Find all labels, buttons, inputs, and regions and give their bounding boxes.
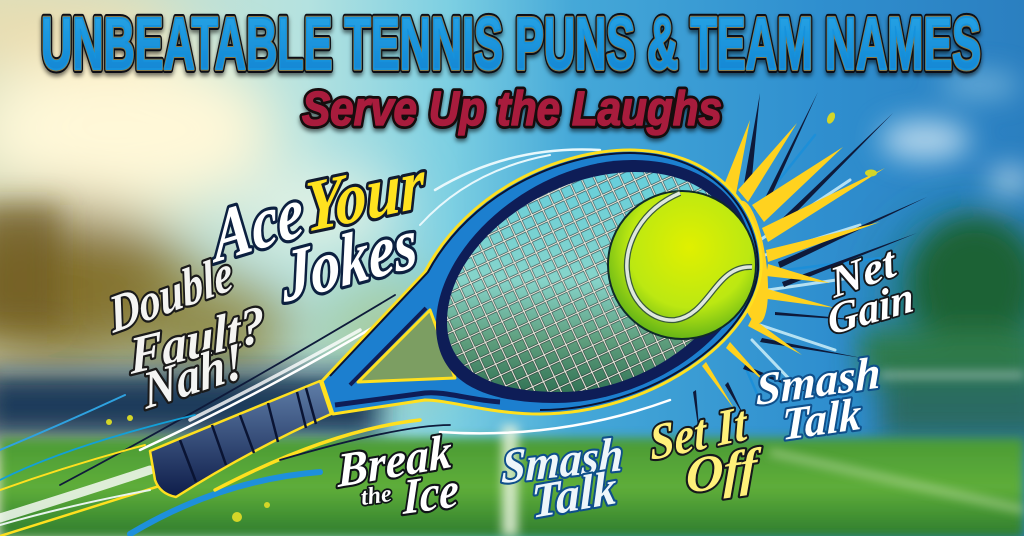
pun: Set It Off: Off (686, 438, 762, 505)
pun: Break the Ice: Break (336, 425, 453, 498)
paint flecks (106, 111, 877, 522)
pun: Smash Talk (bottom): Smash (501, 428, 624, 495)
pun: Smash Talk (right) (756, 346, 880, 450)
pun: Ace Your Jokes: Jokes (277, 201, 420, 319)
pun: Set It Off: Set It (648, 395, 750, 472)
pun: Smash Talk (right): Smash (756, 346, 880, 415)
racket frame silhouette (322, 150, 761, 414)
pun: Ace Your Jokes: Your (304, 141, 427, 248)
pun: Net Gain: Net (825, 237, 901, 308)
speed streaks behind the racket (0, 150, 670, 536)
throat triangle opening (358, 310, 455, 382)
throat lower dark band (335, 393, 500, 405)
head inner dark band (436, 160, 752, 403)
string bed (447, 172, 712, 392)
subtitle: Serve Up the Laughs (302, 83, 722, 136)
pun: Break the Ice: Ice (402, 462, 459, 526)
pun: Smash Talk (bottom): Talk (531, 461, 617, 529)
pun: Set It Off (648, 395, 762, 505)
grip (150, 381, 331, 497)
subtitle: Serve Up the Laughs (302, 83, 722, 136)
pun: Double Fault? Nah!: Double (104, 243, 237, 345)
pun: Ace Your Jokes: Ace (205, 169, 308, 279)
pun: Double Fault? Nah!: Nah! (139, 330, 247, 421)
tennis ball (608, 191, 756, 339)
impact burst behind the ball (106, 92, 927, 522)
blue and white energy rays (740, 135, 880, 405)
pun: Double Fault? Nah! (104, 243, 267, 421)
pun: Break the Ice (336, 425, 459, 526)
pun: Double Fault? Nah!: Fault? (127, 294, 267, 387)
pun: Break the Ice: the (359, 481, 394, 511)
pun: Ace Your Jokes (205, 141, 427, 319)
pun: Smash Talk (right): Talk (782, 388, 861, 450)
tennis racket (150, 150, 761, 497)
pun: Net Gain (825, 237, 917, 345)
frame black outline (330, 153, 758, 410)
pun: Smash Talk (bottom) (501, 428, 624, 529)
black spikes (693, 92, 927, 440)
yellow spikes (702, 120, 885, 410)
pun: Net Gain: Gain (825, 273, 917, 345)
